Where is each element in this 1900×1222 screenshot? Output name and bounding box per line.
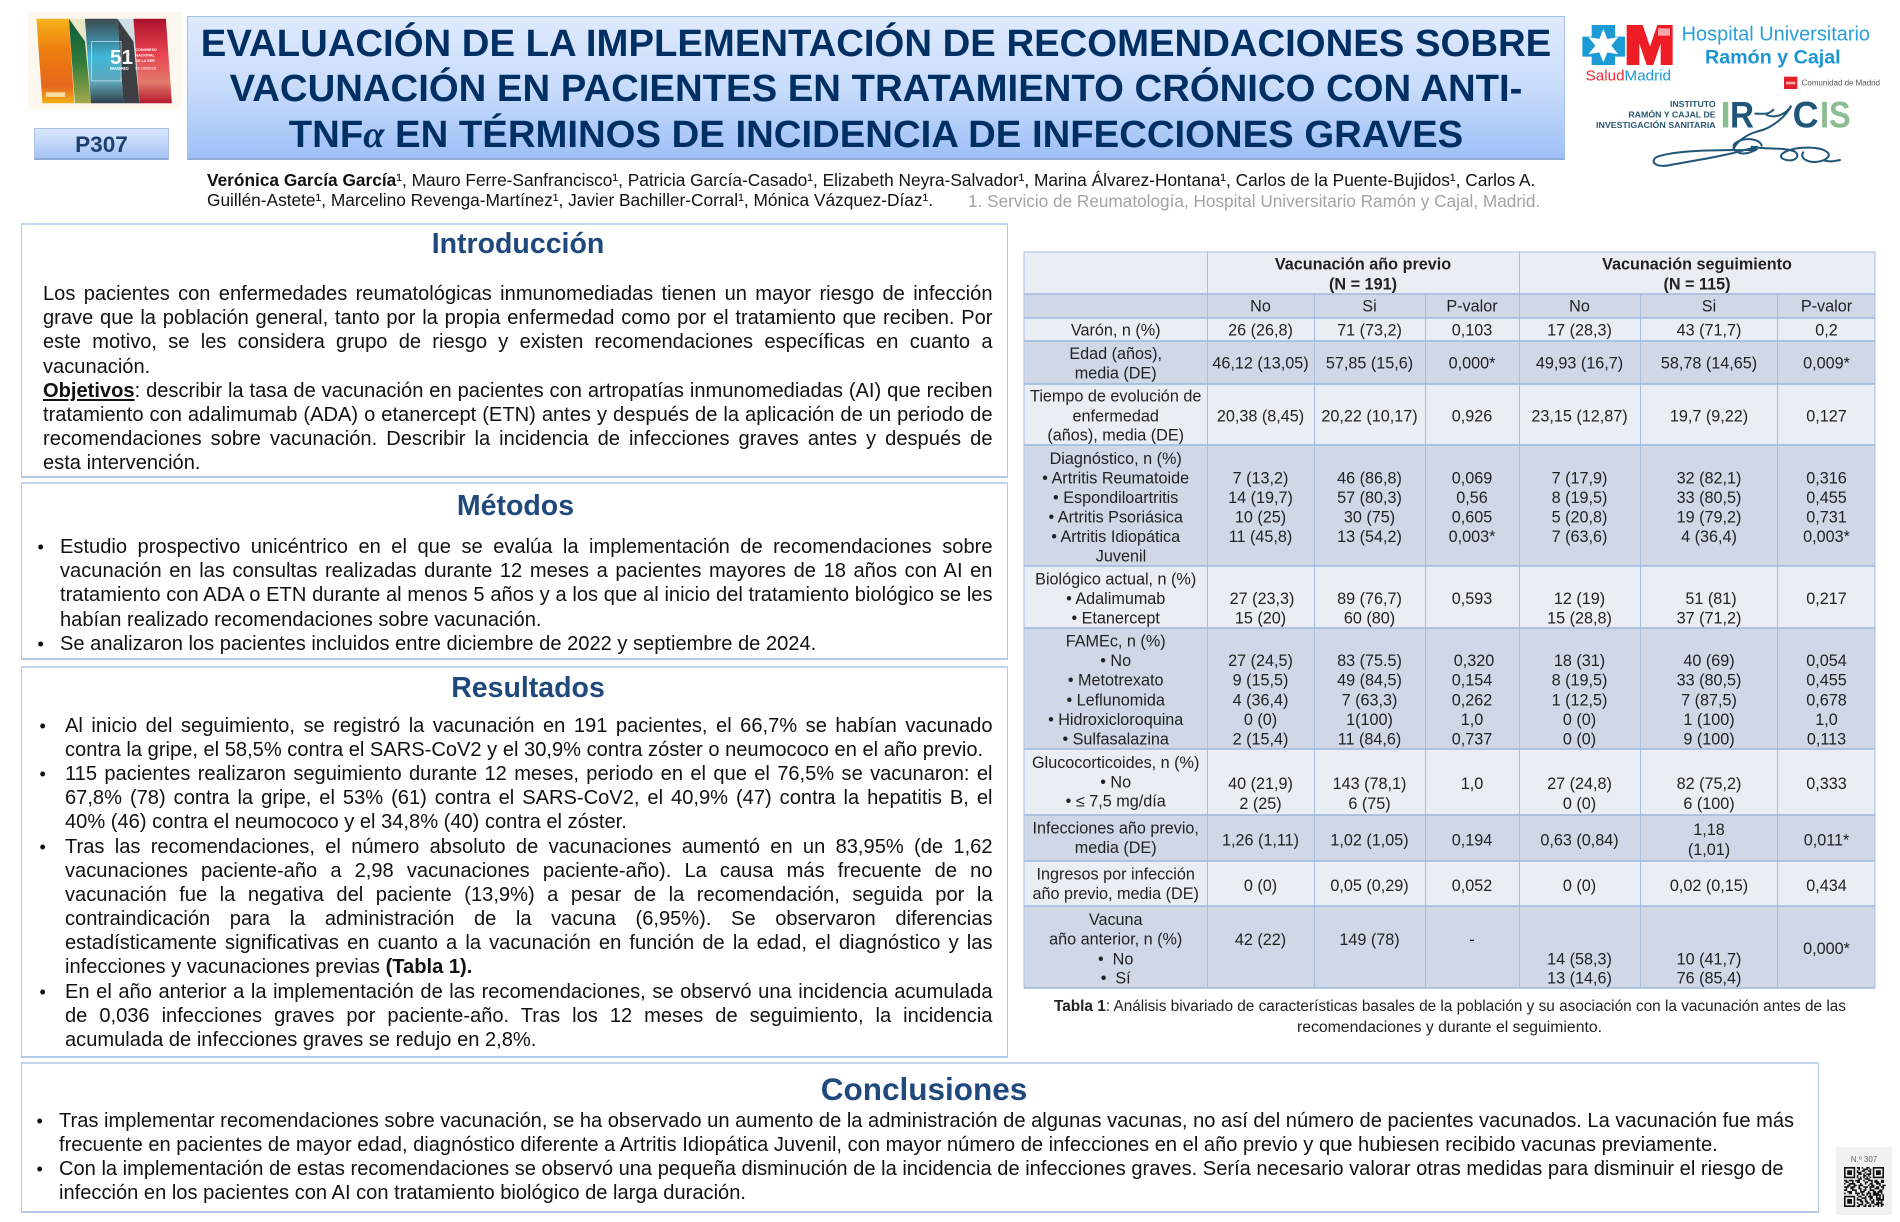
row: ingresos por infección: año previo, media (DE) [1032, 885, 1199, 903]
row: biológico actual: • Etanercept [1071, 610, 1160, 628]
row: diagnóstico: 19 (79,2) [1677, 509, 1741, 527]
row: FAMEc: 18 (31) [1554, 652, 1605, 670]
row: infecciones año previo [1024, 815, 1875, 861]
row: diagnóstico: 13 (54,2) [1337, 528, 1402, 546]
row: infecciones año previo: 1,18 [1693, 821, 1725, 839]
row: varón [1024, 318, 1875, 341]
subheader row: P-valor [1801, 298, 1853, 316]
row: FAMEc: 11 (84,6) [1338, 730, 1401, 748]
heading: métodos: Métodos [457, 490, 574, 522]
row: infecciones año previo: 0,011* [1804, 832, 1850, 850]
row: biológico actual: 27 (23,3) [1230, 590, 1294, 608]
row: FAMEc: 49 (84,5) [1337, 672, 1402, 690]
row: tiempo de evolución: 23,15 (12,87) [1531, 407, 1628, 425]
row: diagnóstico: 11 (45,8) [1229, 528, 1292, 546]
row: ingresos por infección: 0,052 [1452, 877, 1492, 895]
row: FAMEc: 0,320 [1454, 652, 1494, 670]
header row [1024, 252, 1875, 294]
row: FAMEc: 0 (0) [1563, 730, 1596, 748]
logo: congreso SER: NACIONAL [135, 53, 155, 57]
hospital name: Hospital Universitario [1682, 23, 1870, 45]
IRyCIS logo letters [1720, 94, 1851, 136]
row: FAMEc: 2 (15,4) [1233, 730, 1288, 748]
row: diagnóstico: 7 (63,6) [1552, 528, 1607, 546]
row: glucocorticoides [1024, 749, 1875, 815]
heading: introducción: Introducción [432, 228, 604, 260]
row: diagnóstico: 7 (17,9) [1552, 469, 1607, 487]
row: varón: 26 (26,8) [1228, 322, 1293, 340]
row: ingresos por infección: 0 (0) [1563, 877, 1596, 895]
row: FAMEc: • Metotrexato [1068, 672, 1164, 690]
panel: resultados [21, 666, 1008, 1058]
row: FAMEc: • No [1100, 652, 1131, 670]
row: FAMEc: 1,0 [1815, 711, 1838, 729]
subheader row [1024, 294, 1875, 318]
IRyCIS logo letters: C [1793, 94, 1819, 136]
row: biológico actual: 37 (71,2) [1677, 610, 1741, 628]
row: vacuna año anterior: 13 (14,6) [1547, 970, 1612, 988]
row: FAMEc: 0,262 [1452, 691, 1492, 709]
logo: congreso SER: DE LA SER [135, 59, 155, 63]
header row: (N = 191) [1329, 275, 1397, 293]
row: biológico actual: 15 (20) [1235, 610, 1286, 628]
row: infecciones año previo: 0,194 [1452, 832, 1492, 850]
text: introducción y objetivos: grave que la población general, tanto por la propia enfermedad como por el tratamiento que reciben. Por [43, 307, 992, 329]
row: infecciones año previo: (1,01) [1688, 841, 1730, 859]
heading: resultados: Resultados [451, 672, 605, 704]
SaludMadrid wordmark: SaludMadrid [1586, 68, 1671, 85]
header row: (N = 115) [1663, 275, 1731, 293]
row: varón: 71 (73,2) [1337, 322, 1402, 340]
title banner [187, 16, 1565, 160]
row: biológico actual: 60 (80) [1344, 610, 1395, 628]
row: vacuna año anterior: 76 (85,4) [1677, 970, 1741, 988]
Comunidad de Madrid mark [1784, 77, 1880, 89]
row: biológico actual: Biológico actual, n (%) [1035, 571, 1196, 589]
bullets column: • • [36, 1111, 43, 1179]
row: varón: 0,103 [1452, 322, 1492, 340]
QR code [1836, 1147, 1892, 1215]
row: FAMEc: 9 (100) [1683, 730, 1735, 748]
text: métodos bullet 1: vacunación en las consultas realizadas durante 12 meses a pacientes mayores de 18 años con AI en [60, 560, 992, 582]
text: introducción y objetivos: tratamiento con adalimumab (ADA) o etanercept (ETN) antes y después de la aplicación de un periodo de [43, 404, 992, 426]
row: vacuna año anterior: • Sí [1101, 970, 1131, 988]
row: biológico actual: • Adalimumab [1066, 590, 1165, 608]
row: diagnóstico: 33 (80,5) [1677, 489, 1741, 507]
text: resultados: contraindicación para la administración de la vacuna (6,95%). Se observaron diferencias [65, 908, 992, 930]
row: diagnóstico: 7 (13,2) [1233, 469, 1288, 487]
IRyCIS institute text: INVESTIGACIÓN SANITARIA [1596, 119, 1716, 130]
row: diagnóstico: 8 (19,5) [1552, 489, 1607, 507]
text: resultados: 67,8% (78) contra la gripe, el 53% (61) contra el SARS-CoV2, el 40,9% (47) contra la hepatitis B, el [65, 787, 992, 809]
icon: SaludMadrid cross [1582, 25, 1625, 65]
row: diagnóstico: • Artritis Idiopática [1051, 528, 1180, 546]
panel: introducción [21, 223, 1008, 478]
subheader row: P-valor [1446, 298, 1498, 316]
row: FAMEc: 1 (12,5) [1552, 691, 1607, 709]
table 1 [1024, 252, 1876, 989]
row: FAMEc: 1,0 [1461, 711, 1483, 729]
row: diagnóstico: • Artritis Reumatoide [1042, 469, 1189, 487]
row: biológico actual: 51 (81) [1685, 590, 1737, 608]
row: infecciones año previo: Infecciones año previo, [1032, 819, 1199, 837]
row: infecciones año previo: 1,26 (1,11) [1222, 832, 1299, 850]
row: diagnóstico: 0,56 [1456, 489, 1488, 507]
hospital name [1682, 23, 1870, 68]
row: ingresos por infección: 0 (0) [1244, 877, 1277, 895]
row: tiempo de evolución: Tiempo de evolución de [1030, 388, 1201, 406]
text: resultados: 40% (46) contra el neumococo y el 34,8% (40) contra el zóster. [65, 811, 627, 833]
text: resultados: vacunaciones paciente-año a 2,98 vacunaciones paciente-año). La causa más frecuente de no [65, 860, 992, 882]
row: glucocorticoides: 82 (75,2) [1677, 775, 1741, 793]
row: tiempo de evolución: 20,22 (10,17) [1321, 407, 1418, 425]
row: varón: Varón, n (%) [1071, 322, 1161, 340]
logo: hospital and IRyCIS [1582, 23, 1880, 167]
row: glucocorticoides: 1,0 [1461, 775, 1483, 793]
header row: Vacunación año previo [1275, 256, 1451, 274]
text: resultados: En el año anterior a la implementación de las recomendaciones, se observó una incidencia acumulada [65, 981, 992, 1003]
logo: congreso SER: 51 [110, 46, 133, 69]
IRyCIS institute text: RAMÓN Y CAJAL DE [1628, 108, 1716, 119]
QR code: N.º 307 [1851, 1155, 1878, 1164]
row: tiempo de evolución: (años), media (DE) [1047, 427, 1184, 445]
text: introducción y objetivos: recomendaciones sobre vacunación. Describir la incidencia de infecciones graves antes y después de [43, 428, 992, 450]
row: diagnóstico: 0,003* [1449, 528, 1496, 546]
row: diagnóstico: Juvenil [1096, 547, 1146, 565]
row: tiempo de evolución: 0,926 [1452, 407, 1492, 425]
row: biológico actual: 0,217 [1806, 590, 1847, 608]
text: resultados: contra la gripe, el 58,5% contra el SARS-CoV2 y el 30,9% contra zóster o neumococo en el año previo. [65, 739, 983, 761]
text: métodos bullet 1: habían realizado recomendaciones sobre vacunación. [60, 609, 541, 631]
row: vacuna año anterior: 42 (22) [1235, 931, 1286, 949]
row: FAMEc: 7 (63,3) [1342, 691, 1397, 709]
row: glucocorticoides: 40 (21,9) [1228, 775, 1293, 793]
row: glucocorticoides: 6 (100) [1683, 795, 1735, 813]
row: diagnóstico: 0,731 [1806, 509, 1847, 527]
authors second line: Guillén-Astete¹, Marcelino Revenga-Martínez¹, Javier Bachiller-Corral¹, Mónica Vázquez-Díaz¹. [207, 190, 933, 210]
row: vacuna año anterior: 10 (41,7) [1677, 950, 1741, 968]
row: edad: Edad (años), [1069, 345, 1162, 363]
text: conclusiones: Tras implementar recomendaciones sobre vacunación, se ha observado un aumento de la administración de algunas vacunas, no así del número de pacientes vacunados. La vacunación fue más [59, 1110, 1794, 1132]
row: edad: 58,78 (14,65) [1661, 355, 1757, 373]
subheader row: No [1250, 298, 1271, 316]
row: diagnóstico [1024, 445, 1875, 566]
row: ingresos por infección: 0,02 (0,15) [1670, 877, 1748, 895]
row: diagnóstico: 0,605 [1452, 509, 1492, 527]
text: resultados [65, 715, 993, 1051]
bullet: • [38, 634, 44, 654]
row: edad: 0,000* [1449, 355, 1496, 373]
row: glucocorticoides: 2 (25) [1239, 795, 1282, 813]
title banner: EVALUACIÓN DE LA IMPLEMENTACIÓN DE RECOMENDACIONES SOBRE [201, 22, 1551, 65]
text: resultados: vacunación fue la negativa del paciente (13,9%) a pesar de la recomendación, seguida por la [65, 884, 992, 906]
row: diagnóstico: 0,069 [1452, 469, 1492, 487]
row: ingresos por infección: Ingresos por infección [1037, 866, 1195, 884]
icon: Madrid red M [1627, 25, 1673, 65]
row: vacuna año anterior: - [1469, 931, 1475, 949]
row: FAMEc: 0 (0) [1563, 711, 1596, 729]
authors: Verónica García García¹, Mauro Ferre-Sanfrancisco¹, Patricia García-Casado¹, Elizabeth Neyra-Salvador¹, Marina Álvarez-Hontana¹, Carlos de la Puente-Bujidos¹, Carlos A. [207, 170, 1535, 190]
text: conclusiones: frecuente en pacientes de mayor edad, diagnóstico diferente a Artritis Idiopática Juvenil, con mayor número de infecciones en el año previo y que hubiesen recibido vacunas previamente. [59, 1134, 1718, 1156]
text: métodos bullet 1: tratamiento con ADA o ETN durante al menos 5 años y a los que al inicio del tratamiento biológico se les [60, 584, 992, 606]
row: FAMEc: 0,455 [1806, 672, 1847, 690]
text: introducción y objetivos: este motivo, se les considera grupo de riesgo y existen recomendaciones específicas en cuanto a [43, 331, 992, 353]
row: glucocorticoides: • No [1100, 773, 1131, 791]
logo: congreso SER: 13-16/05/25 [135, 66, 157, 71]
IRyCIS logo letters: R [1730, 94, 1754, 136]
IRyCIS logo letters: I [1720, 94, 1731, 136]
hospital name: Ramón y Cajal [1705, 46, 1841, 68]
row: tiempo de evolución: enfermedad [1072, 407, 1159, 425]
row: vacuna año anterior: Vacuna [1089, 911, 1143, 929]
text: introducción y objetivos: esta intervención. [43, 452, 200, 474]
row: FAMEc: 4 (36,4) [1233, 691, 1288, 709]
text: métodos bullet 1: Estudio prospectivo unicéntrico en el que se evalúa la implementación de recomendaciones sobre [60, 536, 992, 558]
row: FAMEc: 0,737 [1452, 730, 1492, 748]
row: glucocorticoides: Glucocorticoides, n (%) [1032, 754, 1199, 772]
row: FAMEc: 0,678 [1806, 691, 1847, 709]
panel: conclusiones [21, 1062, 1819, 1213]
subheader row: No [1569, 298, 1590, 316]
row: diagnóstico: 0,003* [1803, 528, 1851, 546]
text: introducción y objetivos: Objetivos: describir la tasa de vacunación en pacientes con artropatías inmunomediadas (AI) que reciben [43, 380, 992, 402]
row: diagnóstico: 14 (19,7) [1228, 489, 1293, 507]
row: FAMEc [1024, 628, 1875, 749]
row: diagnóstico: 32 (82,1) [1677, 469, 1741, 487]
row: FAMEc: FAMEc, n (%) [1066, 633, 1166, 651]
bullet: • [38, 537, 44, 557]
affiliation: 1. Servicio de Reumatología, Hospital Universitario Ramón y Cajal, Madrid. [968, 191, 1540, 211]
text: resultados: Tras las recomendaciones, el número absoluto de vacunaciones aumentó en un 83,95% (de 1,62 [65, 836, 992, 858]
row: ingresos por infección [1024, 861, 1875, 906]
Comunidad de Madrid mark: Comunidad de Madrid [1802, 78, 1880, 87]
row: FAMEc: 83 (75.5) [1337, 652, 1402, 670]
row: ingresos por infección: 0,434 [1806, 877, 1847, 895]
row: FAMEc: 40 (69) [1683, 652, 1735, 670]
subheader row: Si [1362, 298, 1377, 316]
row: biológico actual: 0,593 [1452, 590, 1492, 608]
row: vacuna año anterior: 149 (78) [1339, 931, 1400, 949]
row: diagnóstico: 0,316 [1806, 469, 1847, 487]
subheader row: Si [1702, 298, 1716, 316]
row: infecciones año previo: 1,02 (1,05) [1330, 832, 1409, 850]
row: vacuna año anterior [1024, 906, 1875, 988]
row: FAMEc: 0,054 [1806, 652, 1847, 670]
text: resultados: 115 pacientes realizaron seguimiento durante 12 meses, periodo en el que el 76,5% se vacunaron: el [65, 763, 992, 785]
title banner: TNFα EN TÉRMINOS DE INCIDENCIA DE INFECCIONES GRAVES [289, 113, 1463, 156]
row: biológico actual: 12 (19) [1554, 590, 1605, 608]
row: FAMEc: • Leflunomida [1067, 691, 1165, 709]
row: infecciones año previo: 0,63 (0,84) [1540, 832, 1619, 850]
row: tiempo de evolución: 20,38 (8,45) [1217, 407, 1304, 425]
row: diagnóstico: 57 (80,3) [1337, 489, 1402, 507]
row: diagnóstico: • Espondiloartritis [1053, 489, 1178, 507]
row: FAMEc: • Hidroxicloroquina [1048, 711, 1183, 729]
row: tiempo de evolución: 19,7 (9,22) [1670, 407, 1748, 425]
row: FAMEc: 1 (100) [1683, 711, 1735, 729]
title banner: VACUNACIÓN EN PACIENTES EN TRATAMIENTO CRÓNICO CON ANTI- [230, 67, 1522, 110]
row: biológico actual: 15 (28,8) [1547, 610, 1612, 628]
IRyCIS institute text: INSTITUTO [1670, 99, 1716, 109]
row: glucocorticoides: 0,333 [1806, 775, 1847, 793]
row: FAMEc: 27 (24,5) [1228, 652, 1293, 670]
row: vacuna año anterior: 0,000* [1803, 940, 1851, 958]
row: FAMEc: 9 (15,5) [1233, 672, 1288, 690]
header row: Vacunación seguimiento [1602, 256, 1792, 274]
poster number P307 [34, 128, 169, 160]
text: resultados: infecciones y vacunaciones previas (Tabla 1). [65, 956, 472, 978]
logo: congreso SER [28, 12, 182, 110]
row: ingresos por infección: 0,05 (0,29) [1330, 877, 1409, 895]
row: biológico actual [1024, 566, 1875, 628]
row: glucocorticoides: • ≤ 7,5 mg/día [1066, 793, 1166, 811]
IRyCIS swirl signature [1654, 106, 1840, 166]
IRyCIS logo letters: IS [1820, 94, 1851, 136]
row: diagnóstico: Diagnóstico, n (%) [1050, 450, 1182, 468]
row: edad: media (DE) [1075, 364, 1157, 382]
text: resultados: de 0,036 infecciones graves por paciente-año. Tras los 12 meses de seguimiento, la incidencia [65, 1005, 992, 1027]
row: diagnóstico: 10 (25) [1235, 509, 1286, 527]
text: resultados: acumulada de infecciones graves se redujo en 2,8%. [65, 1029, 536, 1051]
text: conclusiones: Con la implementación de estas recomendaciones se observó una pequeña disminución de la incidencia de infecciones graves. Sería necesario valorar otras medidas para disminuir el riesgo de [59, 1158, 1784, 1180]
logo: congreso SER: MADRID [110, 66, 129, 71]
row: diagnóstico: 4 (36,4) [1681, 528, 1737, 546]
row: FAMEc: 0 (0) [1244, 711, 1277, 729]
row: edad: 46,12 (13,05) [1212, 355, 1309, 373]
text: métodos bullet 1: Se analizaron los pacientes incluidos entre diciembre de 2022 y septiembre de 2024. [60, 633, 816, 655]
row: edad: 57,85 (15,6) [1326, 355, 1413, 373]
heading: conclusiones: Conclusiones [821, 1071, 1027, 1107]
row: FAMEc: 1(100) [1346, 711, 1393, 729]
text: resultados: Al inicio del seguimiento, se registró la vacunación en 191 pacientes, el 66,7% se habían vacunado [65, 715, 992, 737]
row: FAMEc: 0,113 [1807, 730, 1846, 748]
row: glucocorticoides: 0 (0) [1563, 795, 1596, 813]
row: glucocorticoides: 143 (78,1) [1333, 775, 1406, 793]
row: edad [1024, 341, 1875, 384]
row: glucocorticoides: 27 (24,8) [1547, 775, 1612, 793]
bullets column: • • • • [40, 716, 46, 1002]
text: introducción y objetivos [43, 283, 993, 474]
IRyCIS institute text [1596, 99, 1716, 130]
text: conclusiones: infección en los pacientes con AI con tratamiento biológico de larga duración. [59, 1182, 746, 1204]
row: FAMEc: • Sulfasalazina [1062, 730, 1169, 748]
row: vacuna año anterior: • No [1098, 950, 1133, 968]
logo: congreso SER: CONGRESO [135, 48, 157, 52]
row: vacuna año anterior: año anterior, n (%) [1049, 931, 1182, 949]
row: tiempo de evolución: 0,127 [1806, 407, 1847, 425]
row: diagnóstico: • Artritis Psoriásica [1049, 509, 1183, 527]
row: varón: 43 (71,7) [1677, 322, 1741, 340]
text: resultados: estadísticamente significativas en cuanto a la vacunación en función de la edad, el diagnóstico y las [65, 932, 992, 954]
row: FAMEc: 8 (19,5) [1552, 672, 1607, 690]
row: varón: 17 (28,3) [1547, 322, 1612, 340]
row: FAMEc: 7 (87,5) [1681, 691, 1737, 709]
row: biológico actual: 89 (76,7) [1337, 590, 1402, 608]
table caption: Tabla 1: Análisis bivariado de características basales de la población y su asociación con la vacunación antes de las [1054, 998, 1846, 1015]
text: introducción y objetivos: Los pacientes con enfermedades reumatológicas inmunomediadas tienen un mayor riesgo de infección [43, 283, 992, 305]
text: conclusiones [59, 1110, 1794, 1204]
row: tiempo de evolución [1024, 384, 1875, 445]
row: diagnóstico: 0,455 [1806, 489, 1847, 507]
panel: métodos [21, 482, 1008, 660]
table caption [1054, 998, 1846, 1036]
text: introducción y objetivos: vacunación. [43, 356, 150, 378]
row: edad: 49,93 (16,7) [1536, 355, 1623, 373]
row: vacuna año anterior: 14 (58,3) [1547, 950, 1612, 968]
row: FAMEc: 33 (80,5) [1677, 672, 1741, 690]
row: edad: 0,009* [1803, 355, 1851, 373]
poster number P307: P307 [75, 132, 128, 157]
table caption: recomendaciones y durante el seguimiento. [1297, 1019, 1602, 1036]
text: métodos bullet 1 [60, 536, 992, 655]
row: FAMEc: 0,154 [1452, 672, 1492, 690]
row: infecciones año previo: media (DE) [1075, 839, 1157, 857]
row: diagnóstico: 5 (20,8) [1552, 509, 1607, 527]
row: diagnóstico: 30 (75) [1344, 509, 1395, 527]
row: diagnóstico: 46 (86,8) [1337, 469, 1402, 487]
row: varón: 0,2 [1815, 322, 1838, 340]
row: glucocorticoides: 6 (75) [1348, 795, 1391, 813]
